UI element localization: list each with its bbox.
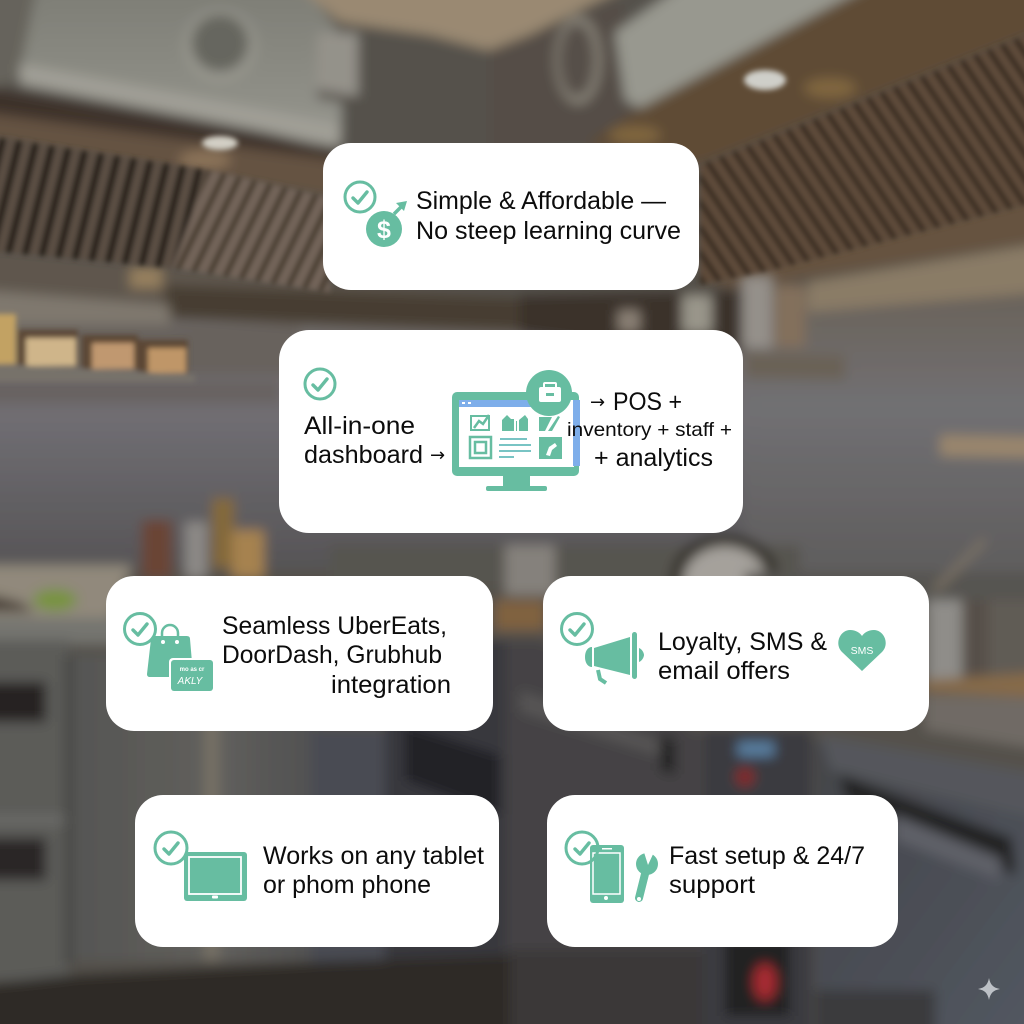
icon: wrench	[636, 849, 658, 901]
text: simple and affordable: Simple & Affordable —	[416, 187, 666, 215]
text: loyalty SMS email: Loyalty, SMS &	[658, 628, 827, 656]
text: seamless integration	[222, 612, 451, 699]
icon: sparkle watermark	[978, 978, 1000, 1000]
icon: dollar coin with arrow	[366, 201, 407, 247]
text: all-in-one dashboard: All-in-one	[304, 412, 415, 440]
panel: simple and affordable	[323, 143, 699, 290]
icon: heart SMS: SMS	[851, 645, 873, 657]
panel: loyalty offers	[543, 576, 929, 731]
icon: shopping bag with ticket: mo as cr	[180, 667, 205, 673]
text: all-in-one dashboard: →	[430, 445, 445, 466]
text: all-in-one dashboard: dashboard	[304, 441, 423, 469]
text: loyalty SMS email: email offers	[658, 657, 790, 685]
panel: all-in-one dashboard	[279, 330, 743, 533]
icon: shopping bag with ticket: AKLY	[177, 676, 204, 687]
text: seamless integration: DoorDash, Grubhub	[222, 641, 442, 669]
text: POS inventory staff analytics: + analytics	[594, 444, 713, 472]
text: fast setup and support: support	[669, 871, 755, 899]
icon: check badge	[345, 182, 375, 212]
text: works on any tablet	[263, 842, 484, 899]
text: loyalty SMS email	[658, 628, 827, 685]
text: all-in-one dashboard	[304, 412, 445, 469]
text: fast setup and support	[669, 842, 865, 899]
icon: heart SMS	[838, 630, 886, 671]
text: POS inventory staff analytics: inventory + staff +	[567, 419, 732, 441]
icon: dollar coin with arrow: $	[377, 216, 391, 244]
text: fast setup and support: Fast setup & 24/7	[669, 842, 865, 870]
text: simple and affordable: No steep learning curve	[416, 217, 681, 245]
text: simple and affordable	[416, 187, 681, 245]
icon: monitor dashboard	[452, 370, 580, 491]
text: seamless integration: integration	[331, 671, 451, 699]
icon: check badge	[566, 832, 598, 864]
panel: delivery integration	[106, 576, 493, 731]
icon: check badge	[305, 369, 335, 399]
panel: fast setup and support	[547, 795, 898, 947]
text: POS inventory staff analytics: POS +	[613, 388, 682, 416]
icon: tablet	[184, 852, 247, 901]
icon: check badge	[155, 832, 187, 864]
text: works on any tablet: or phom phone	[263, 871, 431, 899]
icon: megaphone	[585, 632, 644, 683]
icon: check badge	[562, 614, 592, 644]
text: POS inventory staff analytics	[567, 388, 732, 472]
text: works on any tablet: Works on any tablet	[263, 842, 484, 870]
icon: check badge	[124, 614, 156, 644]
icon: shopping bag with ticket	[147, 625, 215, 693]
icon: phone	[590, 845, 624, 903]
text: POS inventory staff analytics: →	[590, 392, 605, 413]
text: seamless integration: Seamless UberEats,	[222, 612, 447, 640]
panel: works on any device	[135, 795, 499, 947]
